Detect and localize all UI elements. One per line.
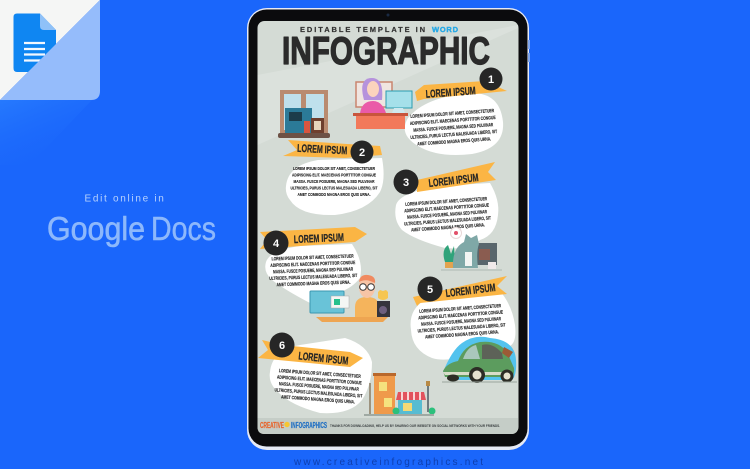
body text: ULTRICIES, PURUS LECTUS MALESUADA LIBERO, SIT <box>417 322 506 335</box>
body text: MASSA. FUSCE POSUERE, MAGNA SED PULVINAR <box>413 122 494 134</box>
number badge: 4 <box>273 238 280 250</box>
section 2 <box>283 140 384 215</box>
heading: LOREM IPSUM <box>298 350 349 368</box>
body text: AMET COMMODO MAGNA EROS QUIS URNA. <box>298 192 370 198</box>
illustration: town buildings <box>364 373 436 416</box>
body text: LOREM IPSUM DOLOR SIT AMET, CONSECTETUER <box>410 108 495 120</box>
section 6 <box>258 332 372 413</box>
body text: ULTRICIES, PURUS LECTUS MALESUADA LIBERO, SIT <box>290 186 378 192</box>
number badge: 3 <box>403 177 409 189</box>
logo: Creative Infographics: CREATIVE <box>260 421 284 430</box>
number badge: 6 <box>279 340 285 352</box>
blob <box>395 183 498 248</box>
illustration: cat with laptop <box>441 228 502 270</box>
body text <box>409 108 498 148</box>
logo: Google Docs: Google <box>47 210 145 247</box>
body text <box>269 253 358 289</box>
section 4 <box>260 227 367 304</box>
illustration: green bubble car <box>442 337 517 383</box>
body text <box>290 166 378 198</box>
section 5 <box>411 276 515 360</box>
number badge: 2 <box>359 147 365 159</box>
heading: LOREM IPSUM <box>445 282 496 300</box>
footer band <box>258 418 518 434</box>
label: edit online: Edit online in <box>84 194 166 204</box>
body text: ULTRICIES, PURUS LECTUS MALESUADA LIBERO, SIT <box>274 387 363 400</box>
number badge: 1 <box>488 74 494 86</box>
heading: editable template: EDITABLE TEMPLATE IN <box>300 25 425 34</box>
body text: AMET COMMODO MAGNA EROS QUIS URNA. <box>417 136 491 148</box>
body text: ADIPISCING ELIT. MAECENAS PORTTITOR CONGUE <box>270 260 356 269</box>
logo: Google Docs <box>47 210 216 247</box>
body text: ADIPISCING ELIT. MAECENAS PORTTITOR CONGUE <box>404 203 490 214</box>
body text: ADIPISCING ELIT. MAECENAS PORTTITOR CONGUE <box>292 172 377 178</box>
ribbon <box>258 340 363 367</box>
logo: Google Docs: Docs <box>151 210 216 247</box>
body text: LOREM IPSUM DOLOR SIT AMET, CONSECTETUER <box>279 368 361 380</box>
heading: LOREM IPSUM <box>297 143 347 157</box>
body text: ADIPISCING ELIT. MAECENAS PORTTITOR CONGUE <box>277 375 362 387</box>
ribbon <box>260 227 367 249</box>
body text: LOREM IPSUM DOLOR SIT AMET, CONSECTETUER <box>272 254 354 262</box>
section 1 <box>405 68 507 155</box>
illustration: window with coffee machine <box>278 90 330 138</box>
body text: ULTRICIES, PURUS LECTUS MALESUADA LIBERO, SIT <box>404 215 491 228</box>
body text <box>403 196 492 234</box>
body text: AMET COMMODO MAGNA EROS QUIS URNA. <box>281 394 355 406</box>
blob <box>286 158 384 215</box>
screen <box>258 21 518 434</box>
website url: www.creativeinfographics.net <box>293 457 483 468</box>
body text: MASSA. FUSCE POSUERE, MAGNA SED PULVINAR <box>294 179 375 185</box>
body text: LOREM IPSUM DOLOR SIT AMET, CONSECTETUER <box>293 166 375 172</box>
illustration: man at computer with cat <box>310 275 390 322</box>
blob <box>265 244 361 304</box>
blob <box>270 338 372 413</box>
heading: LOREM IPSUM <box>294 232 344 246</box>
section 3 <box>394 162 498 248</box>
ribbon <box>413 276 507 306</box>
number badge: 5 <box>427 284 433 296</box>
body text: ADIPISCING ELIT. MAECENAS PORTTITOR CONGUE <box>418 310 504 321</box>
body text <box>274 368 364 406</box>
footer note: THANKS FOR DOWNLOADING, HELP US BY SHARING OUR WEBSITE ON SOCIAL NETWORKS WITH YOUR FRIENDS. <box>330 424 500 428</box>
tablet <box>247 8 530 450</box>
body text: ULTRICIES, PURUS LECTUS MALESUADA LIBERO, SIT <box>269 273 357 282</box>
body text: MASSA. FUSCE POSUERE, MAGNA SED PULVINAR <box>279 381 359 393</box>
body text: AMET COMMODO MAGNA EROS QUIS URNA. <box>425 329 499 341</box>
body text: LOREM IPSUM DOLOR SIT AMET, CONSECTETUER <box>419 303 502 315</box>
heading: LOREM IPSUM <box>425 85 476 101</box>
title: INFOGRAPHIC <box>282 30 490 73</box>
icon: document <box>14 14 56 72</box>
body text: AMET COMMODO MAGNA EROS QUIS URNA. <box>276 280 351 288</box>
heading: editable template: WORD <box>432 25 459 34</box>
body text: AMET COMMODO MAGNA EROS QUIS URNA. <box>411 222 485 234</box>
logo: Creative Infographics <box>260 421 327 430</box>
ribbon <box>417 162 496 192</box>
body text: MASSA. FUSCE POSUERE, MAGNA SED PULVINAR <box>407 209 488 221</box>
body text: MASSA. FUSCE POSUERE, MAGNA SED PULVINAR <box>273 267 354 275</box>
body text: ADIPISCING ELIT. MAECENAS PORTTITOR CONGUE <box>410 115 496 127</box>
body text: ULTRICIES, PURUS LECTUS MALESUADA LIBERO, SIT <box>410 129 497 141</box>
logo: Creative Infographics: INFOGRAPHICS <box>291 421 327 430</box>
ribbon <box>415 81 507 101</box>
illustration: woman at desk <box>353 78 412 129</box>
body text <box>416 303 506 341</box>
blob <box>405 93 503 155</box>
heading: LOREM IPSUM <box>428 172 479 190</box>
body text: MASSA. FUSCE POSUERE, MAGNA SED PULVINAR <box>421 316 502 328</box>
folded corner with Google Docs icon <box>0 0 100 165</box>
blob <box>411 291 515 360</box>
body text: LOREM IPSUM DOLOR SIT AMET, CONSECTETUER <box>405 196 488 208</box>
ribbon <box>283 140 382 158</box>
